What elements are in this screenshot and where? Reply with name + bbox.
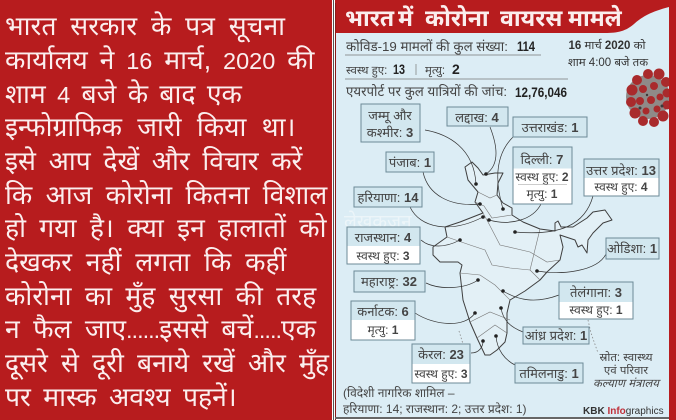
title: कोरोना [425, 5, 490, 31]
panel: left red text: हो गया है। क्या इन हालातों को [5, 213, 326, 243]
foreign nationals note: हरियाणा: 14; राजस्थान: 2; उत्तर प्रदेश: 1) [343, 401, 527, 416]
callout: karnataka [351, 301, 415, 340]
foreign nationals note: (विदेशी नागरिक शामिल – [343, 385, 455, 400]
callout: ladakh [447, 107, 508, 126]
foreign nationals note [343, 385, 527, 416]
callout: karnataka: कर्नाटक: 6 [357, 304, 409, 319]
date note: 16 मार्च 2020 को [569, 38, 646, 52]
callout: telangana: तेलंगाना: 3 [570, 285, 622, 300]
callout: maharashtra: महाराष्ट्र: 32 [361, 274, 417, 289]
callout: telangana [559, 282, 633, 319]
total stats: एयरपोर्ट पर कुल यात्रियों की जांच: [346, 84, 507, 100]
total stats: कोविड-19 मामलों की कुल संख्या: [346, 39, 508, 55]
callout: uttarakhand: उत्तराखंड: 1 [522, 120, 578, 135]
title: में [398, 5, 414, 31]
total stats: 13 [393, 61, 405, 77]
callout: kerala: केरल: 23 [418, 347, 464, 362]
callout: tamil nadu [515, 363, 583, 383]
callout: ladakh: लद्दाख: 4 [455, 110, 500, 125]
title: मामले [568, 5, 623, 31]
panel: left red text: भारत सरकार के पत्र सूचना [5, 11, 285, 41]
callout: uttarakhand [513, 117, 587, 137]
callout: punjab: पंजाब: 1 [389, 155, 431, 170]
panel: left red text: कोरोना का मुँह सुरसा की तरह [5, 281, 316, 311]
total stats: 114 [517, 38, 535, 54]
callout: andhra pradesh: आंध्र प्रदेश: 1 [525, 328, 587, 343]
callout: tamil nadu: तमिलनाडु: 1 [519, 366, 579, 382]
title: वायरस [500, 5, 563, 31]
source note: एवं परिवार [604, 364, 648, 377]
callout: uttar pradesh: स्वस्थ हुए: 4 [594, 180, 648, 195]
panel: left red text: पर मास्क अवश्य पहनें। [5, 382, 237, 412]
panel: left red text: देखकर नहीं लगता कि कहीं [5, 247, 286, 277]
callout: jammu kashmir: जम्मू और [368, 108, 412, 124]
callout: haryana: हरियाणा: 14 [358, 190, 419, 205]
source note: कल्याण मंत्रालय [593, 377, 661, 390]
total stats: मृत्यु: [425, 65, 445, 77]
panel: left red text: इन्फोग्राफिक जारी किया था। [5, 112, 296, 142]
panel: left red text: न फैल जाए......इससे बचें.....एक [5, 314, 316, 344]
leader lines [410, 127, 606, 365]
callout: delhi: दिल्ली: 7 [521, 152, 563, 167]
callout: delhi [513, 147, 572, 204]
callout: kerala [412, 344, 470, 383]
header banner [336, 3, 669, 33]
callout: rajasthan: राजस्थान: 4 [355, 230, 412, 245]
total stats: स्वस्थ हुए: [346, 65, 387, 78]
callout: telangana: स्वस्थ हुए: 1 [569, 303, 623, 318]
callout: uttar pradesh [584, 159, 659, 196]
callout: rajasthan: स्वस्थ हुए: 3 [356, 249, 410, 264]
islands [459, 320, 598, 353]
panel: left red text: शाम 4 बजे के बाद एक [5, 79, 242, 109]
icon: coronavirus [626, 68, 672, 127]
panel: left red text: कि आज कोरोना कितना विशाल [5, 180, 327, 210]
credit: KBK Infographics [583, 406, 664, 417]
india map [433, 162, 612, 355]
watermark: लेखकजन [344, 210, 412, 233]
map markers [458, 172, 539, 343]
total stats: 2 [452, 61, 460, 77]
callout: odisha: ओडिशा: 1 [607, 241, 657, 256]
callout: kerala: स्वस्थ हुए: 3 [414, 367, 468, 382]
callout: punjab [386, 152, 434, 172]
state borders [447, 192, 560, 338]
callout: haryana [354, 187, 422, 207]
callout: maharashtra [354, 271, 425, 292]
panel: left red text: इसे आप देखें और विचार करें [5, 146, 302, 176]
callout: karnataka: मृत्यु: 1 [368, 323, 399, 338]
panel: left red text [0, 0, 332, 420]
date note: शाम 4:00 बजे तक [568, 56, 648, 69]
callout: jammu kashmir [361, 104, 420, 142]
callout: delhi: स्वस्थ हुए: 2 [515, 170, 569, 185]
callout: rajasthan [347, 227, 420, 264]
source note [593, 351, 661, 390]
date note [568, 38, 648, 69]
panel: left red text: कार्यालय ने 16 मार्च, 2020 की [5, 45, 314, 75]
callout: delhi: मृत्यु: 1 [527, 187, 558, 202]
callout: odisha [606, 238, 659, 259]
total stats: 12,76,046 [515, 84, 567, 100]
panel: left red text: दूसरे से दूरी बनाये रखें और मुँह [5, 348, 329, 378]
total stats [345, 38, 568, 100]
title: भारत [345, 5, 395, 31]
source note: स्रोत: स्वास्थ्य [599, 351, 653, 364]
callout: jammu kashmir: कश्मीर: 3 [367, 125, 413, 140]
callout: uttar pradesh: उत्तर प्रदेश: 13 [586, 163, 656, 178]
